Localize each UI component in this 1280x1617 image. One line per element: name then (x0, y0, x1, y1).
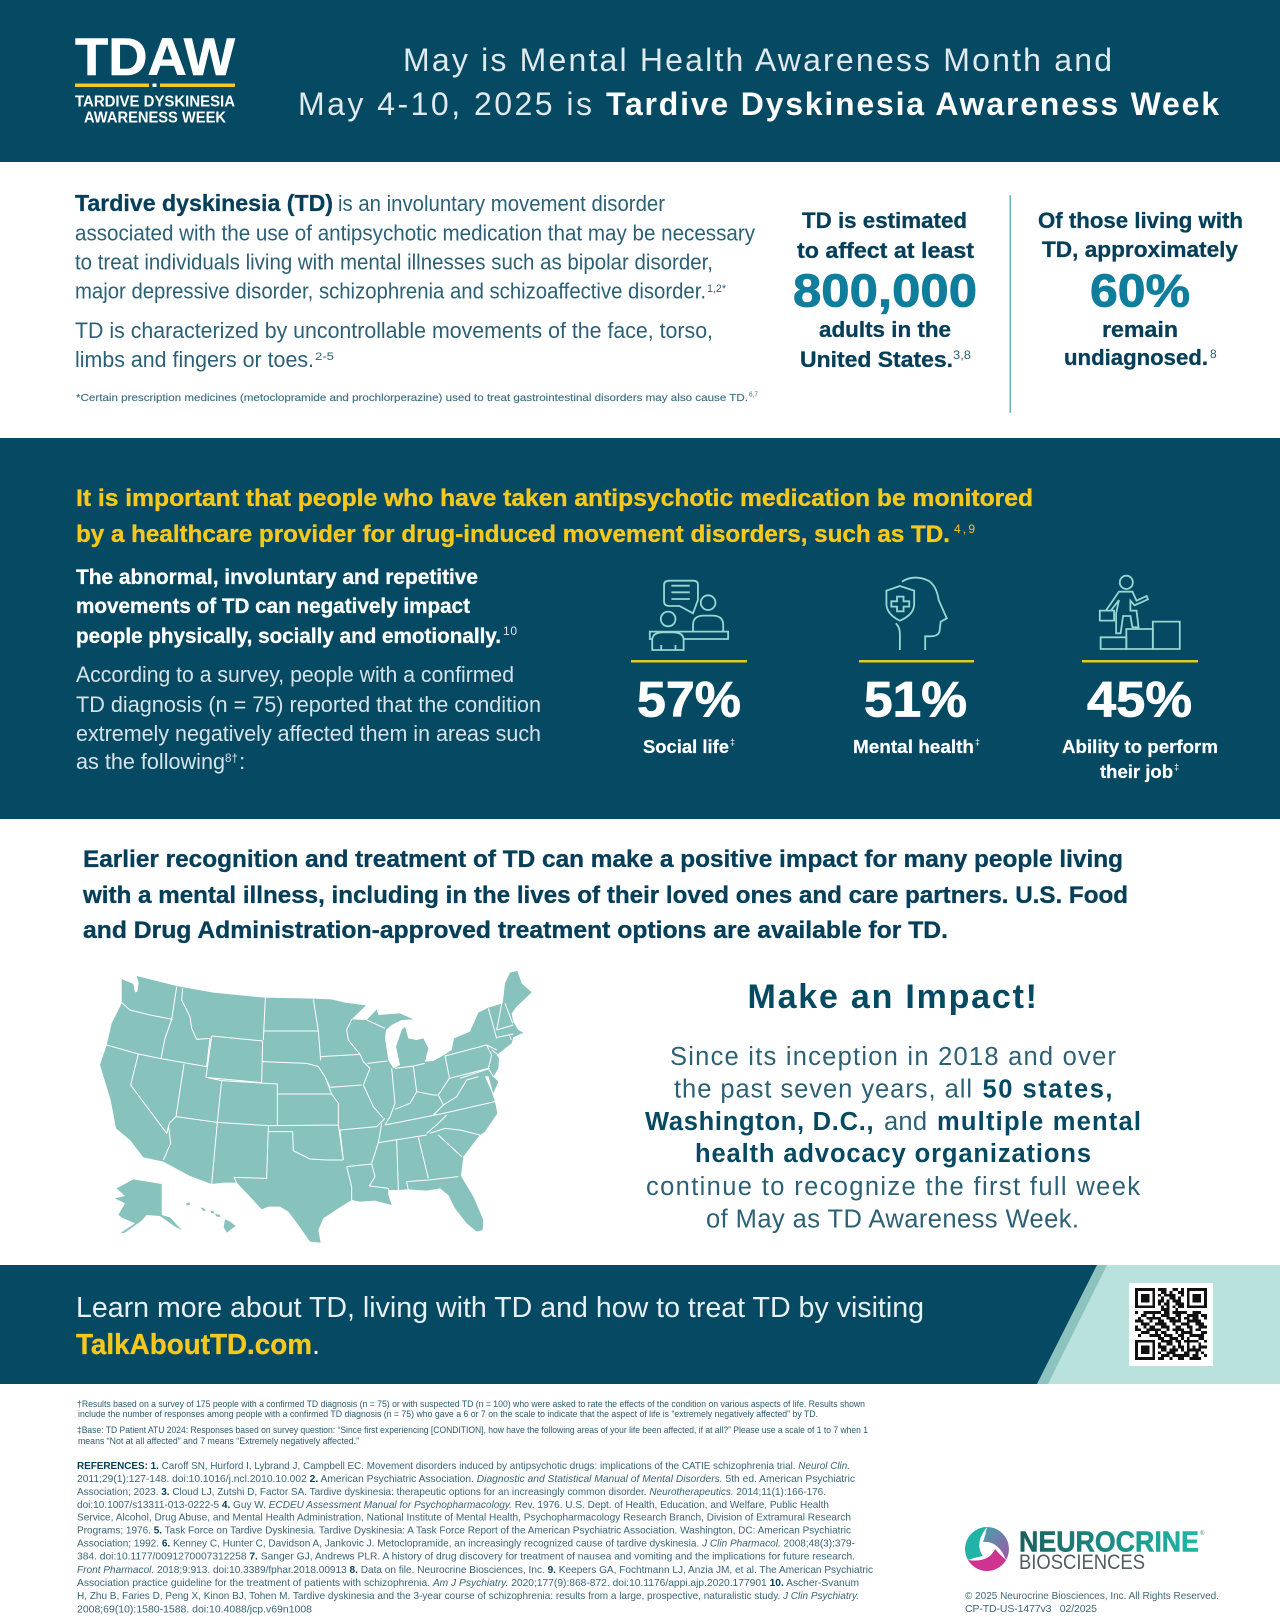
heading: earlier recognition: Earlier recognition and treatment of TD can make a positive impact for many people living (83, 846, 1123, 873)
heading: monitoring: It is important that people who have taken antipsychotic medication be monitored (76, 485, 1033, 512)
panel: learn more banner: . (312, 1329, 320, 1361)
text block: inception: and (884, 1108, 927, 1136)
text block: inception (645, 1043, 1141, 1234)
stat: 800,000 adults: United States. (800, 347, 953, 372)
text block: inception: multiple mental (937, 1108, 1141, 1136)
logo: Neurocrine Biosciences: BIOSCIENCES (1019, 1550, 1145, 1574)
text block: references (77, 1460, 873, 1616)
logo: Neurocrine Biosciences (957, 1524, 1205, 1579)
stat: 60% undiagnosed: Of those living with (1038, 208, 1243, 233)
text block: definition: TD is characterized by uncontrollable movements of the face, torso, (75, 318, 713, 343)
stat: 800,000 adults: 3,8 (953, 348, 971, 362)
stat: 60% undiagnosed: TD, approximately (1042, 237, 1239, 262)
icon: person climbing steps (1100, 576, 1180, 649)
logo: TDAW: TARDIVE DYSKINESIA (75, 94, 235, 110)
logo: TDAW: AWARENESS WEEK (84, 110, 226, 126)
text block: inception: Since its inception in 2018 and over (670, 1043, 1116, 1071)
text block: inception: the past seven years, all (674, 1076, 972, 1104)
text block: survey: TD diagnosis (n = 75) reported that the condition (76, 692, 541, 717)
heading: earlier recognition (82, 846, 1128, 944)
footnote: *Certain prescription medicines (metoclopramide and prochlorperazine) used to treat gastrointestinal disorders may also cause TD. (76, 392, 748, 404)
text block: references: 2008;69(10):1580-1588. doi:10.4088/jcp.v69n1008 (77, 1604, 312, 1616)
text block: definition: limbs and fingers or toes. (75, 347, 314, 372)
text: copyright: CP-TD-US-1477v3 02/2025 (965, 1603, 1097, 1615)
stat: 800,000 adults: to affect at least (797, 238, 975, 263)
title (298, 42, 1219, 122)
stat: ability to perform job: Ability to perform (1062, 737, 1218, 757)
text block: inception: of May as TD Awareness Week. (706, 1206, 1079, 1234)
panel: learn more banner (0, 1265, 1280, 1384)
text block: survey footnotes: means “Not at all affected” and 7 means “Extremely negatively affected.” (78, 1436, 359, 1447)
stat: 60% undiagnosed: remain (1102, 317, 1178, 342)
panel: header banner (0, 0, 1280, 162)
heading: monitoring: 4,9 (954, 522, 975, 536)
text block: definition (75, 190, 756, 372)
text block: survey: as the following (76, 749, 225, 774)
text block: references: Programs; 1976. 5. Task Force on Tardive Dyskinesia. Tardive Dyskinesia: A Task Force Report of the American Psychiatric Association. Washington, DC: American Psychiatric (77, 1524, 851, 1536)
text block: abnormal movements: 10 (503, 624, 517, 638)
text block: survey footnotes: ‡Base: TD Patient ATU 2024: Responses based on survey question: “Since first experiencing [CONDITION], how have the following areas of your life been affected, if at all?” Please use a scale of 1 to 7 when 1 (77, 1425, 868, 1436)
text block: references: 2011;29(1):127-148. doi:10.1016/j.ncl.2010.10.002 2. American Psychiatric Association. Diagnostic and Statistical Manual of Mental Disorders. 5th ed. American Psychiatric (77, 1473, 855, 1485)
text block: abnormal movements: movements of TD can negatively impact (76, 595, 470, 618)
stat: 60% undiagnosed: undiagnosed. (1064, 345, 1208, 370)
text: website link: TalkAboutTD.com (76, 1329, 312, 1361)
text block: survey: : (239, 749, 245, 774)
text block: references: doi:10.1007/s13311-013-0222-5 4. Guy W. ECDEU Assessment Manual for Psychopharmacology. Rev. 1976. U.S. Dept. of Health, Education, and Welfare, Public Health (77, 1499, 829, 1511)
text block: references: Service, Alcohol, Drug Abuse, and Mental Health Administration, National Institute of Mental Health, Psychopharmacology Research Branch, Division of Extramural Research (77, 1512, 851, 1524)
text block: definition: associated with the use of antipsychotic medication that may be necessary (75, 220, 756, 246)
text: copyright (965, 1590, 1219, 1615)
heading: earlier recognition: and Drug Administration-approved treatment options are available for TD. (83, 917, 948, 944)
icon: head with shield (886, 578, 947, 650)
QR code (1129, 1283, 1213, 1366)
panel: make an impact (645, 978, 1141, 1234)
text: learn more: Learn more about TD, living with TD and how to treat TD by visiting (76, 1292, 924, 1324)
text block: references: Association practice guideline for the treatment of patients with schizophrenia. Am J Psychiatry. 2020;177(9):868-872. doi:10.1176/appi.ajp.2020.177901 10. Ascher-Svanum (77, 1577, 859, 1589)
text block: inception: continue to recognize the first full week (646, 1173, 1140, 1201)
text block: definition: 1,2* (707, 283, 727, 295)
stat: 800,000 adults (793, 208, 977, 372)
text block: references: Association; 2023. 3. Cloud LJ, Zutshi D, Factor SA. Tardive dyskinesia: therapeutic options for an increasingly common disorder. Neurotherapeutics. 2014;11(1):166-176. (77, 1486, 826, 1498)
heading: make an impact: Make an Impact! (748, 978, 1037, 1016)
text block: definition: is an involuntary movement disorder (338, 191, 665, 216)
stat: social life (631, 581, 747, 757)
text block: survey: According to a survey, people with a confirmed (76, 662, 514, 687)
heading: earlier recognition: with a mental illness, including in the lives of their loved ones and care partners. U.S. Food (82, 882, 1128, 909)
heading: monitoring (76, 485, 1033, 548)
stat: mental health (853, 578, 980, 757)
stat: 60% undiagnosed: 8 (1210, 347, 1217, 361)
text block: abnormal movements: people physically, socially and emotionally. (76, 625, 501, 648)
text block: definition: Tardive dyskinesia (TD) (75, 190, 333, 216)
logo: TDAW: TDAW (75, 28, 235, 87)
icon: conversation at desk (650, 581, 728, 650)
text block: definition: major depressive disorder, schizophrenia and schizoaffective disorder. (75, 278, 706, 304)
stat: social life: Social life (643, 737, 729, 757)
text block: survey footnotes: include the number of responses among people with a confirmed TD diagnosis (n = 75) who gave a 6 or 7 on the scale to indicate that the aspect of life is “extremely negatively affected” by TD. (78, 1409, 818, 1420)
title: May 4-10, 2025 is (298, 86, 592, 122)
text block: survey (76, 662, 541, 774)
stat: 800,000 adults: TD is estimated (802, 208, 967, 233)
text block: references: Front Pharmacol. 2018;9:913. doi:10.3389/fphar.2018.00913 8. Data on file. Neurocrine Biosciences, Inc. 9. Keepers GA, Fochtmann LJ, Anzia JM, et al. The American Psychiatric (77, 1564, 873, 1576)
stat: 800,000 adults: adults in the (819, 317, 951, 342)
stat: 800,000 adults: 800,000 (793, 264, 977, 316)
text block: references: 384. doi:10.1177/0091270007312258 7. Sanger GJ, Andrews PLR. A history of drug discovery for treatment of nausea and vomiting and the implications for future research. (77, 1550, 855, 1562)
stat: social life: 57% (637, 672, 741, 728)
icon: swirl (957, 1524, 1009, 1579)
stat: ability to perform job: 45% (1087, 672, 1192, 728)
text block: abnormal movements (76, 566, 517, 648)
footnote: 6,7 (749, 392, 758, 398)
text block: survey: 8† (225, 751, 238, 765)
title: May is Mental Health Awareness Month and (403, 42, 1112, 78)
stat: ability to perform job: ‡ (1174, 762, 1179, 772)
stat: mental health: 51% (864, 672, 967, 728)
logo: Neurocrine Biosciences: NEUROCRINE (1019, 1526, 1199, 1558)
panel: monitoring and impact (0, 438, 1280, 819)
text block: inception: 50 states, (982, 1076, 1112, 1104)
stat: social life: ‡ (730, 737, 735, 747)
stat: mental health: ‡ (975, 737, 980, 747)
logo: TDAW (75, 28, 235, 126)
text block: references: Association; 1992. 6. Kenney C, Hunter C, Davidson A, Jankovic J. Metoclopramide, an increasingly recognized cause of tardive dyskinesia. J Clin Pharmacol. 2008;48(3):379- (77, 1538, 855, 1550)
text: copyright: © 2025 Neurocrine Biosciences, Inc. All Rights Reserved. (965, 1590, 1219, 1602)
stat: 60% undiagnosed (1038, 208, 1243, 370)
stat: mental health: Mental health (853, 737, 974, 757)
text block: abnormal movements: The abnormal, involuntary and repetitive (76, 566, 478, 589)
text block: survey footnotes: †Results based on a survey of 175 people with a confirmed TD diagnosis (n = 75) or with suspected TD (n = 100) who were asked to rate the effects of the condition on various aspects of life. Results shown (77, 1399, 865, 1410)
stat: 60% undiagnosed: 60% (1090, 264, 1190, 316)
panel: what is TD (75, 190, 1243, 413)
text block: definition: 2-5 (315, 351, 334, 363)
title: Tardive Dyskinesia Awareness Week (606, 86, 1219, 122)
text block: inception: health advocacy organizations (695, 1140, 1091, 1168)
text block: inception: Washington, D.C., (645, 1108, 874, 1136)
text block: survey: extremely negatively affected them in areas such (76, 721, 541, 746)
stat: ability to perform job (1062, 576, 1218, 782)
logo: Neurocrine Biosciences: ® (1200, 1530, 1205, 1537)
heading: monitoring: by a healthcare provider for drug-induced movement disorders, such as TD. (76, 521, 950, 548)
stat: ability to perform job: their job (1100, 762, 1173, 782)
text block: references: H, Zhu B, Faries D, Peng X, Kinon BJ, Tohen M. Tardive dyskinesia and the 3-year course of schizophrenia: results from a large, prospective, naturalistic study. J Clin Psychiatry. (77, 1590, 859, 1602)
map: United States (100, 971, 532, 1243)
text block: references: REFERENCES: 1. Caroff SN, Hurford I, Lybrand J, Campbell EC. Movement disorders induced by antipsychotic drugs: implications of the CATIE schizophrenia trial. Neurol Clin. (77, 1460, 850, 1472)
text block: definition: to treat individuals living with mental illnesses such as bipolar disorder, (75, 250, 713, 274)
text block: survey footnotes (77, 1399, 868, 1447)
